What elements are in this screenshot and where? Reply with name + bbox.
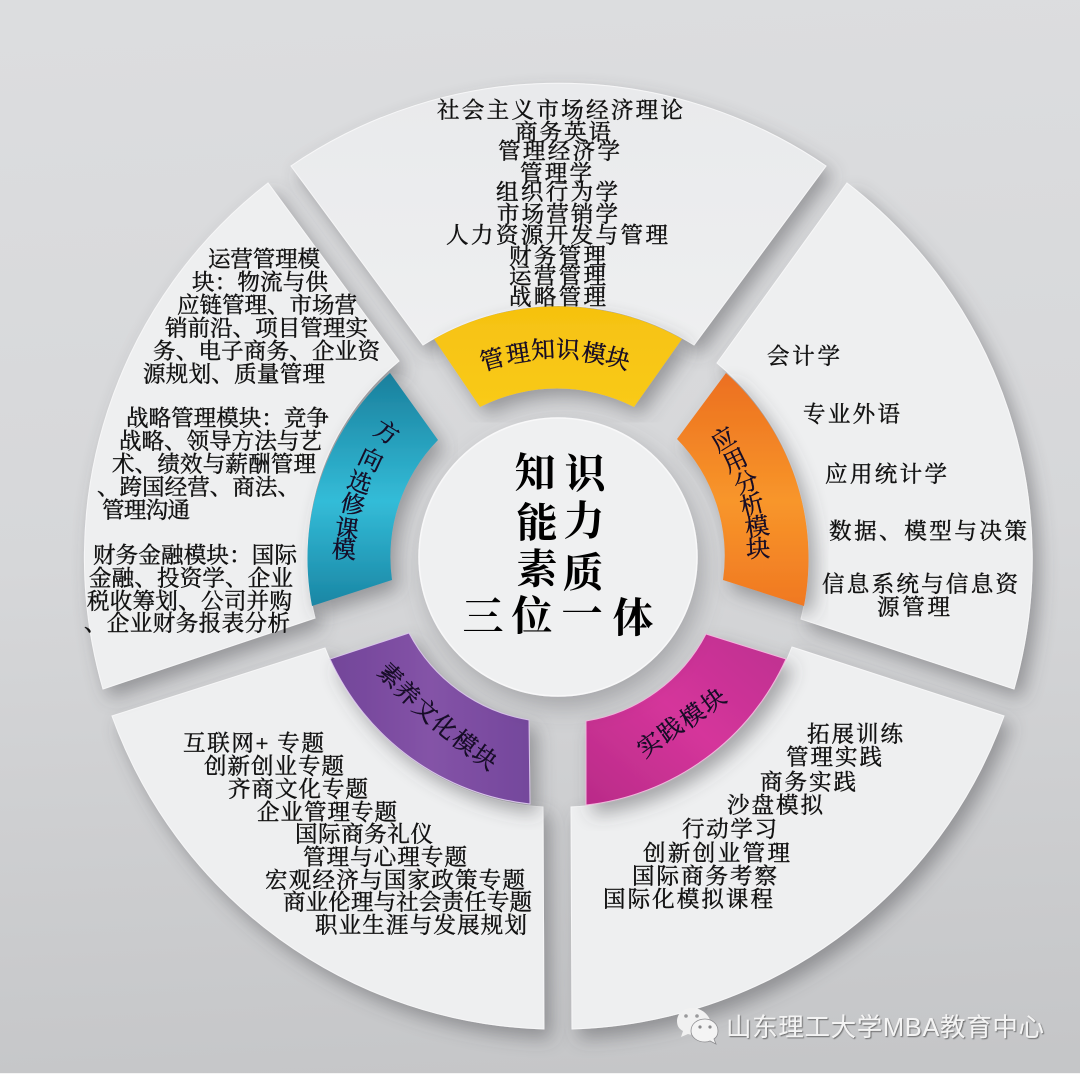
band: magenta module label: 实 (632, 727, 668, 763)
text block: practice courses: 国际商务考察 (632, 864, 777, 889)
text block: management knowledge courses: 人力资源开发与管理 (446, 223, 668, 248)
watermark text: 山东理工大学MBA教育中心 (726, 1014, 1044, 1042)
panel: management knowledge module (291, 83, 826, 407)
text block: strategic management electives: 战略、领导方法与艺 (119, 429, 322, 454)
band: teal module label: 课 (333, 514, 361, 545)
text block: management knowledge courses: 财务管理 (509, 244, 606, 269)
panel shape: top sector (291, 83, 826, 345)
text block: strategic management electives (97, 406, 329, 523)
text block: strategic management electives: 战略管理模块：竞争 (126, 406, 329, 431)
band: yellow module label: 知 (530, 336, 556, 365)
band: purple module label: 块 (467, 740, 502, 776)
band: yellow module label: 识 (555, 336, 582, 365)
band: yellow module label (434, 306, 682, 407)
text block: management knowledge courses: 社会主义市场经济理论 (437, 98, 683, 123)
band: purple module label: 养 (389, 676, 425, 712)
icon: wechat bubbles (677, 1008, 718, 1044)
text block: finance electives (84, 543, 297, 636)
band: teal module label (307, 373, 438, 606)
text block: finance electives: 金融、投资学、企业 (89, 566, 293, 591)
central circle with title (419, 418, 697, 696)
panel shape: bottom-right sector (571, 647, 1004, 1029)
text block: strategic management electives: 术、绩效与薪酬管理 (112, 452, 316, 477)
text block: literacy and culture topics: 企业管理专题 (257, 800, 397, 825)
title: knowledge ability quality: 一 (562, 591, 602, 637)
panel shape: left sector (84, 183, 399, 689)
text block: operations management electives: 块：物流与供 (192, 270, 328, 295)
text block: applied analysis courses: 源管理 (877, 595, 950, 620)
text block: practice courses: 管理实践 (786, 745, 882, 770)
title: knowledge ability quality: 质 (562, 550, 604, 596)
band: orange module label: 块 (745, 535, 771, 564)
text block: practice courses: 商务实践 (760, 770, 856, 795)
band: purple module label: 素 (372, 658, 408, 694)
band: purple module label: 模 (446, 725, 482, 761)
title: knowledge ability quality: 素 (516, 546, 558, 592)
text block: operations management electives: 应链管理、市场营 (177, 293, 357, 318)
text block: management knowledge courses: 管理学 (520, 161, 592, 186)
title: knowledge ability quality: 知 (514, 450, 556, 496)
text block: management knowledge courses: 商务英语 (515, 120, 611, 145)
band: purple module label: 文 (407, 693, 443, 729)
text block: literacy and culture topics (183, 731, 532, 938)
band: orange module label: 用 (719, 445, 752, 479)
text block: strategic management electives: 、跨国经营、商法、 (97, 475, 300, 500)
title: knowledge ability quality: 体 (612, 595, 654, 641)
text block: applied analysis courses: 会计学 (767, 344, 840, 369)
text block: practice courses: 国际化模拟课程 (603, 887, 773, 912)
band: yellow module label: 管 (477, 344, 507, 377)
title: knowledge ability quality: 能 (516, 500, 558, 546)
text block: literacy and culture topics: 创新创业专题 (204, 754, 344, 779)
text block: literacy and culture topics: 管理与心理专题 (303, 845, 467, 870)
text block: applied analysis courses: 应用统计学 (825, 462, 947, 487)
band: magenta module label: 块 (696, 683, 732, 719)
band: magenta module label (586, 634, 786, 805)
title: knowledge ability quality: 识 (564, 451, 610, 497)
panel shape: right sector (717, 183, 1032, 689)
text block: management knowledge courses: 战略管理 (509, 285, 606, 310)
text block: practice courses: 行动学习 (682, 817, 777, 842)
text block: applied analysis courses (767, 344, 1027, 620)
text block: finance electives: 、企业财务报表分析 (84, 611, 290, 636)
text block: literacy and culture topics: 齐商文化专题 (228, 777, 368, 802)
band: magenta module label: 模 (675, 698, 711, 734)
band: teal module label: 选 (344, 467, 375, 500)
band: purple module label (330, 633, 530, 804)
text block: operations management electives: 源规划、质量管理 (143, 362, 325, 387)
band: orange module label: 析 (737, 489, 767, 521)
band: orange module label: 模 (743, 512, 771, 543)
panel shape: bottom-left sector (112, 648, 544, 1029)
text block: literacy and culture topics: 职业生涯与发展规划 (315, 913, 527, 938)
panel: applied analysis module (677, 183, 1032, 689)
panel: practice module (571, 634, 1004, 1029)
band: yellow module label: 理 (504, 340, 532, 370)
title: knowledge ability quality (462, 450, 654, 641)
band: magenta module label: 践 (653, 712, 689, 748)
text block: literacy and culture topics: 商业伦理与社会责任专题 (283, 890, 532, 915)
band: yellow module label: 块 (603, 343, 633, 376)
panel: literacy and culture module (112, 633, 544, 1029)
text block: literacy and culture topics: 互联网+ 专题 (183, 731, 324, 756)
text block: practice courses: 沙盘模拟 (727, 793, 823, 818)
text block: literacy and culture topics: 宏观经济与国家政策专题 (265, 868, 525, 893)
text block: management knowledge courses: 市场营销学 (497, 202, 618, 227)
text block: practice courses: 拓展训练 (807, 722, 904, 747)
band: yellow module label: 模 (580, 339, 608, 370)
text block: finance electives: 财务金融模块：国际 (93, 543, 297, 568)
text block: practice courses (603, 722, 904, 912)
title: knowledge ability quality: 三 (462, 594, 504, 640)
text block: management knowledge courses (437, 98, 683, 310)
band: purple module label: 化 (426, 709, 462, 745)
text block: management knowledge courses: 管理经济学 (498, 139, 620, 164)
band: teal module label: 方 (369, 415, 404, 451)
text block: management knowledge courses: 运营管理 (509, 264, 606, 289)
text block: literacy and culture topics: 国际商务礼仪 (295, 822, 433, 847)
title: knowledge ability quality: 力 (564, 498, 604, 544)
text block: operations management electives: 运营管理模 (208, 247, 320, 272)
text block: finance electives: 税收筹划、公司并购 (87, 589, 292, 614)
text block: applied analysis courses: 专业外语 (803, 402, 900, 427)
band: orange module label: 分 (731, 467, 762, 500)
text block: operations management electives: 务、电子商务、企业资 (153, 339, 380, 364)
text block: management knowledge courses: 组织行为学 (496, 180, 618, 205)
panel: elective direction module (84, 183, 438, 689)
text block: applied analysis courses: 信息系统与信息资 (822, 572, 1018, 597)
text block: practice courses: 创新创业管理 (643, 841, 790, 866)
band: orange module label (677, 373, 809, 606)
band: teal module label: 模 (331, 536, 357, 565)
text block: operations management electives: 销前沿、项目管理实 (165, 316, 368, 341)
text block: applied analysis courses: 数据、模型与决策 (829, 519, 1027, 544)
band: teal module label: 向 (354, 443, 387, 478)
text block: operations management electives (143, 247, 380, 387)
text block: strategic management electives: 管理沟通 (102, 498, 190, 523)
band: orange module label: 应 (706, 422, 741, 458)
band: teal module label: 修 (338, 490, 367, 521)
title: knowledge ability quality: 位 (512, 593, 552, 639)
